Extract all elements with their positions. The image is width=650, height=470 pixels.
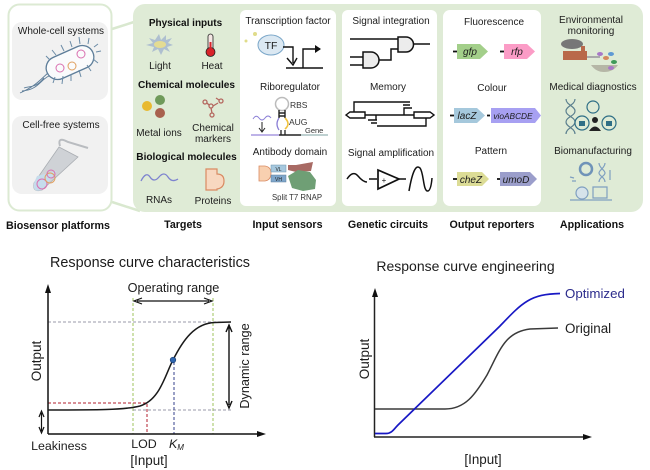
panel: genetic circuits: Memory [370,82,406,93]
reporter gene: lacZ [450,108,485,123]
chart: response curve characteristics: K [169,437,177,451]
panel: genetic circuits: Signal amplification [348,148,434,159]
optimized curve [375,294,560,434]
reporter gene: lacZ: lacZ [458,111,477,122]
panel: targets [136,18,237,207]
panel: genetic circuits: + [382,176,387,185]
chart: response curve characteristics: M [177,443,184,452]
reporter gene: cheZ [453,172,489,186]
panel: targets: markers [195,134,231,145]
panel: applications [549,15,637,200]
panel: whole-cell systems: Whole-cell systems [18,26,104,37]
panel: input sensors: Riboregulator [260,82,321,93]
panel: biosensor platforms [8,4,112,210]
section labels: Biosensor platforms [6,220,110,232]
panel: applications: monitoring [568,26,614,37]
panel: genetic circuits [342,10,437,206]
reporter gene: vioABCDE: vioABCDE [493,111,533,121]
icon: memory circuit [346,102,434,126]
icon: chemical markers [203,98,223,117]
response curve [48,322,231,410]
reporter gene: vioABCDE [487,108,541,123]
chart: response curve characteristics: Dynamic range [238,323,252,409]
axis and marker labels: Output [29,340,44,381]
panel: targets: Chemical molecules [138,80,235,91]
icon: amplifier [347,167,432,191]
icon: antibody domain and split T7 RNAP: VL [275,167,282,173]
panel: input sensors: Split T7 RNAP [272,193,322,202]
panel: output reporters [443,10,541,206]
panel: cell-free systems: Cell-free systems [22,120,100,131]
original curve [375,328,558,409]
operating range arrow [134,298,212,304]
panel: input sensors: AUG [289,117,307,127]
icon: bacterium [20,37,101,93]
icon: light [146,34,173,55]
panel: targets: Proteins [195,196,231,207]
icon: logic gates [350,37,430,68]
reporter gene: rfp: rfp [511,47,523,58]
leakiness arrow [39,411,44,433]
icon: antibody domain and split T7 RNAP [259,162,316,191]
panel: targets: Metal ions [136,128,182,139]
operating range label: Operating range [128,281,219,295]
panel: whole-cell systems [12,22,108,100]
panel: targets: Light [149,61,171,72]
chart title: Response curve characteristics [50,255,250,271]
section labels: Genetic circuits [348,219,428,231]
icon: RNA wave [141,174,178,181]
KM point [170,357,176,363]
panel: input sensors: Transcription factor [245,16,331,27]
connector lines between platforms and targets [112,22,140,211]
chart: response curve characteristics: Leakiness [31,439,87,453]
panel: output reporters: Colour [477,83,507,94]
panel: output reporters: Pattern [475,146,507,157]
section labels: Input sensors [252,219,323,231]
icon: antibody domain and split T7 RNAP: VH [275,177,282,183]
icon: metal ions [142,95,165,118]
chart: response curve characteristics: LOD [131,437,157,451]
chart: response curve characteristics [29,255,266,468]
panel: targets: RNAs [146,195,172,206]
panel: genetic circuits: Signal integration [352,16,430,27]
reporter gene: umoD [497,172,537,186]
panel: targets: Physical inputs [149,18,223,29]
reporter gene: cheZ: cheZ [460,175,483,186]
icon: transcription factor [244,32,323,68]
icon: transcription factor: TF [265,40,277,52]
chart title: Response curve engineering [376,258,555,274]
section labels: Targets [164,219,202,231]
axes [374,292,586,437]
panel: input sensors: Gene [305,126,323,135]
panel: targets: Biological molecules [136,152,237,163]
reporter gene: rfp [500,44,535,59]
panel: applications: Biomanufacturing [554,146,632,157]
chart: response curve engineering: [Input] [464,452,502,467]
panel: applications: Medical diagnostics [549,82,637,93]
panel: applications: Environmental [559,15,623,26]
panel: input sensors: RBS [290,100,308,110]
section labels: Applications [560,219,624,231]
section labels [6,219,624,232]
icon: reaction tube [34,140,88,191]
chart: response curve engineering [357,258,625,467]
icon: heat [206,34,215,56]
panel: input sensors: Antibody domain [253,147,327,158]
icon: protein [206,169,224,190]
panel: targets: Chemical [192,123,234,134]
chart: response curve engineering: Output [357,338,372,379]
reporter gene: gfp: gfp [463,47,477,58]
panel: input sensors [240,10,336,206]
chart: response curve characteristics: [Input] [130,453,168,468]
dynamic range arrow [226,325,232,408]
output axes [48,289,260,434]
icon: environmental monitoring [561,39,618,72]
panel: green background [133,4,643,212]
curve labels: Optimized [565,286,625,301]
section labels: Output reporters [450,219,535,231]
icon: medical diagnostics [566,99,616,134]
icon: biomanufacturing [570,163,612,200]
chart: response curve engineering: Original [565,321,611,336]
icon: riboregulator [251,98,328,135]
reporter gene: umoD: umoD [503,175,529,186]
panel: cell-free systems [12,116,108,194]
panel: targets: Heat [201,61,223,72]
reporter gene: gfp [453,44,488,59]
panel: output reporters: Fluorescence [464,17,524,28]
